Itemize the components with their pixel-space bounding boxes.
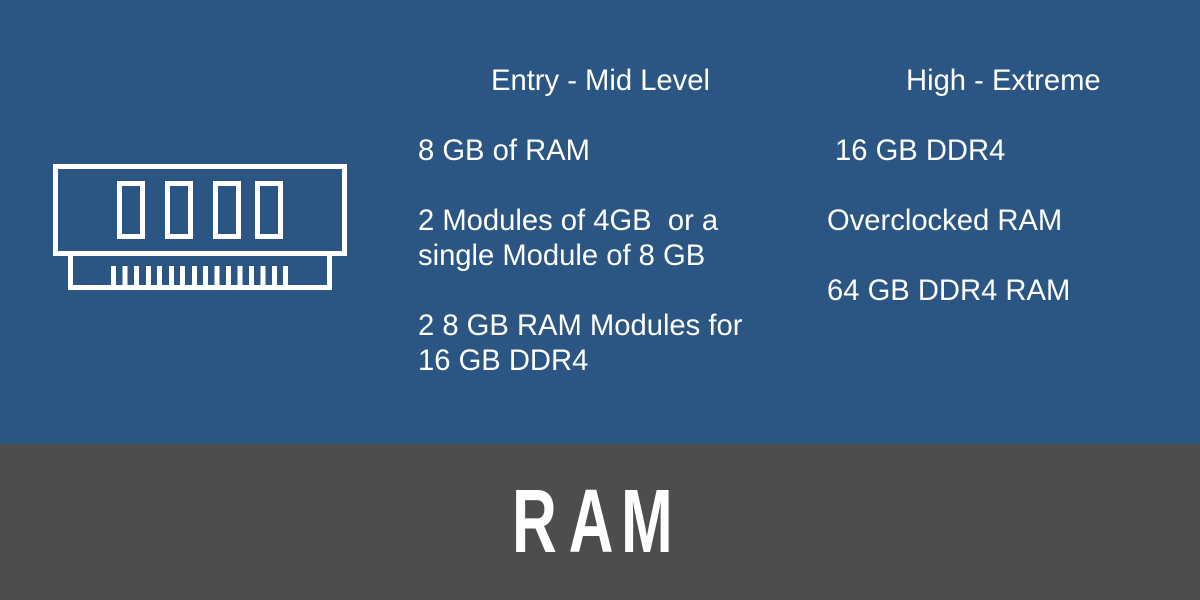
text: 8 GB of RAM: 8 GB of RAM xyxy=(418,135,590,167)
panel: bottom grey band xyxy=(0,444,1200,600)
icon: RAM module xyxy=(53,164,347,290)
heading: Entry - Mid Level: Entry - Mid Level xyxy=(491,65,710,97)
text: 2 modules option: 2 Modules of 4GB or a single Module of 8 GB xyxy=(418,205,718,272)
text: 2 8 GB modules: 2 8 GB RAM Modules for 16 GB DDR4 xyxy=(418,310,742,377)
heading: High - Extreme: High - Extreme xyxy=(906,65,1101,97)
text: 64 GB DDR4 RAM: 64 GB DDR4 RAM xyxy=(827,275,1070,307)
panel: top blue area xyxy=(0,0,1200,444)
text: 16 GB DDR4: 16 GB DDR4 xyxy=(835,135,1005,167)
text: Overclocked RAM: Overclocked RAM xyxy=(827,205,1062,237)
